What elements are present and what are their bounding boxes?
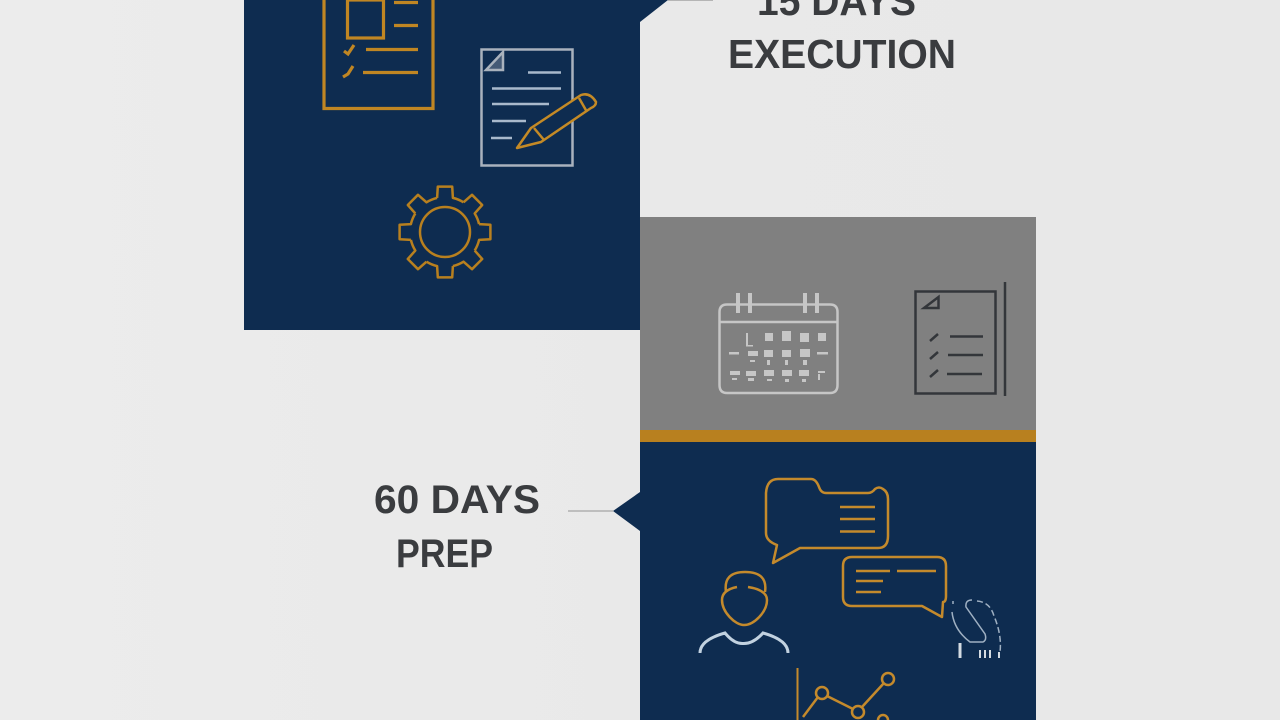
icon: large speech bubble bbox=[766, 479, 888, 563]
heading: 60 days prep bbox=[374, 478, 540, 576]
icon: line chart bbox=[798, 668, 894, 720]
heading: 15 days execution: EXECUTION bbox=[728, 31, 956, 77]
connector line: execution bbox=[668, 0, 713, 1]
panel: schedule band bbox=[640, 217, 1036, 430]
icon: gear bbox=[400, 187, 490, 277]
heading: 60 days prep: 60 DAYS bbox=[374, 478, 540, 522]
heading: 60 days prep: PREP bbox=[396, 532, 493, 576]
panel: execution bbox=[244, 0, 668, 330]
icon: person bbox=[700, 572, 788, 653]
icon: dashed phone sketch bbox=[952, 600, 1000, 658]
icon: document with pencil bbox=[482, 50, 596, 166]
gold divider bar bbox=[640, 430, 1036, 442]
connector line: prep bbox=[568, 510, 613, 512]
icon: calendar bbox=[720, 293, 838, 393]
icon: dark checklist bbox=[916, 282, 1005, 396]
heading: 15 days execution bbox=[728, 0, 956, 77]
panel: preparation bbox=[613, 442, 1036, 720]
icon: gold checklist clipboard bbox=[324, 0, 433, 108]
icon: small speech bubble bbox=[843, 557, 946, 617]
